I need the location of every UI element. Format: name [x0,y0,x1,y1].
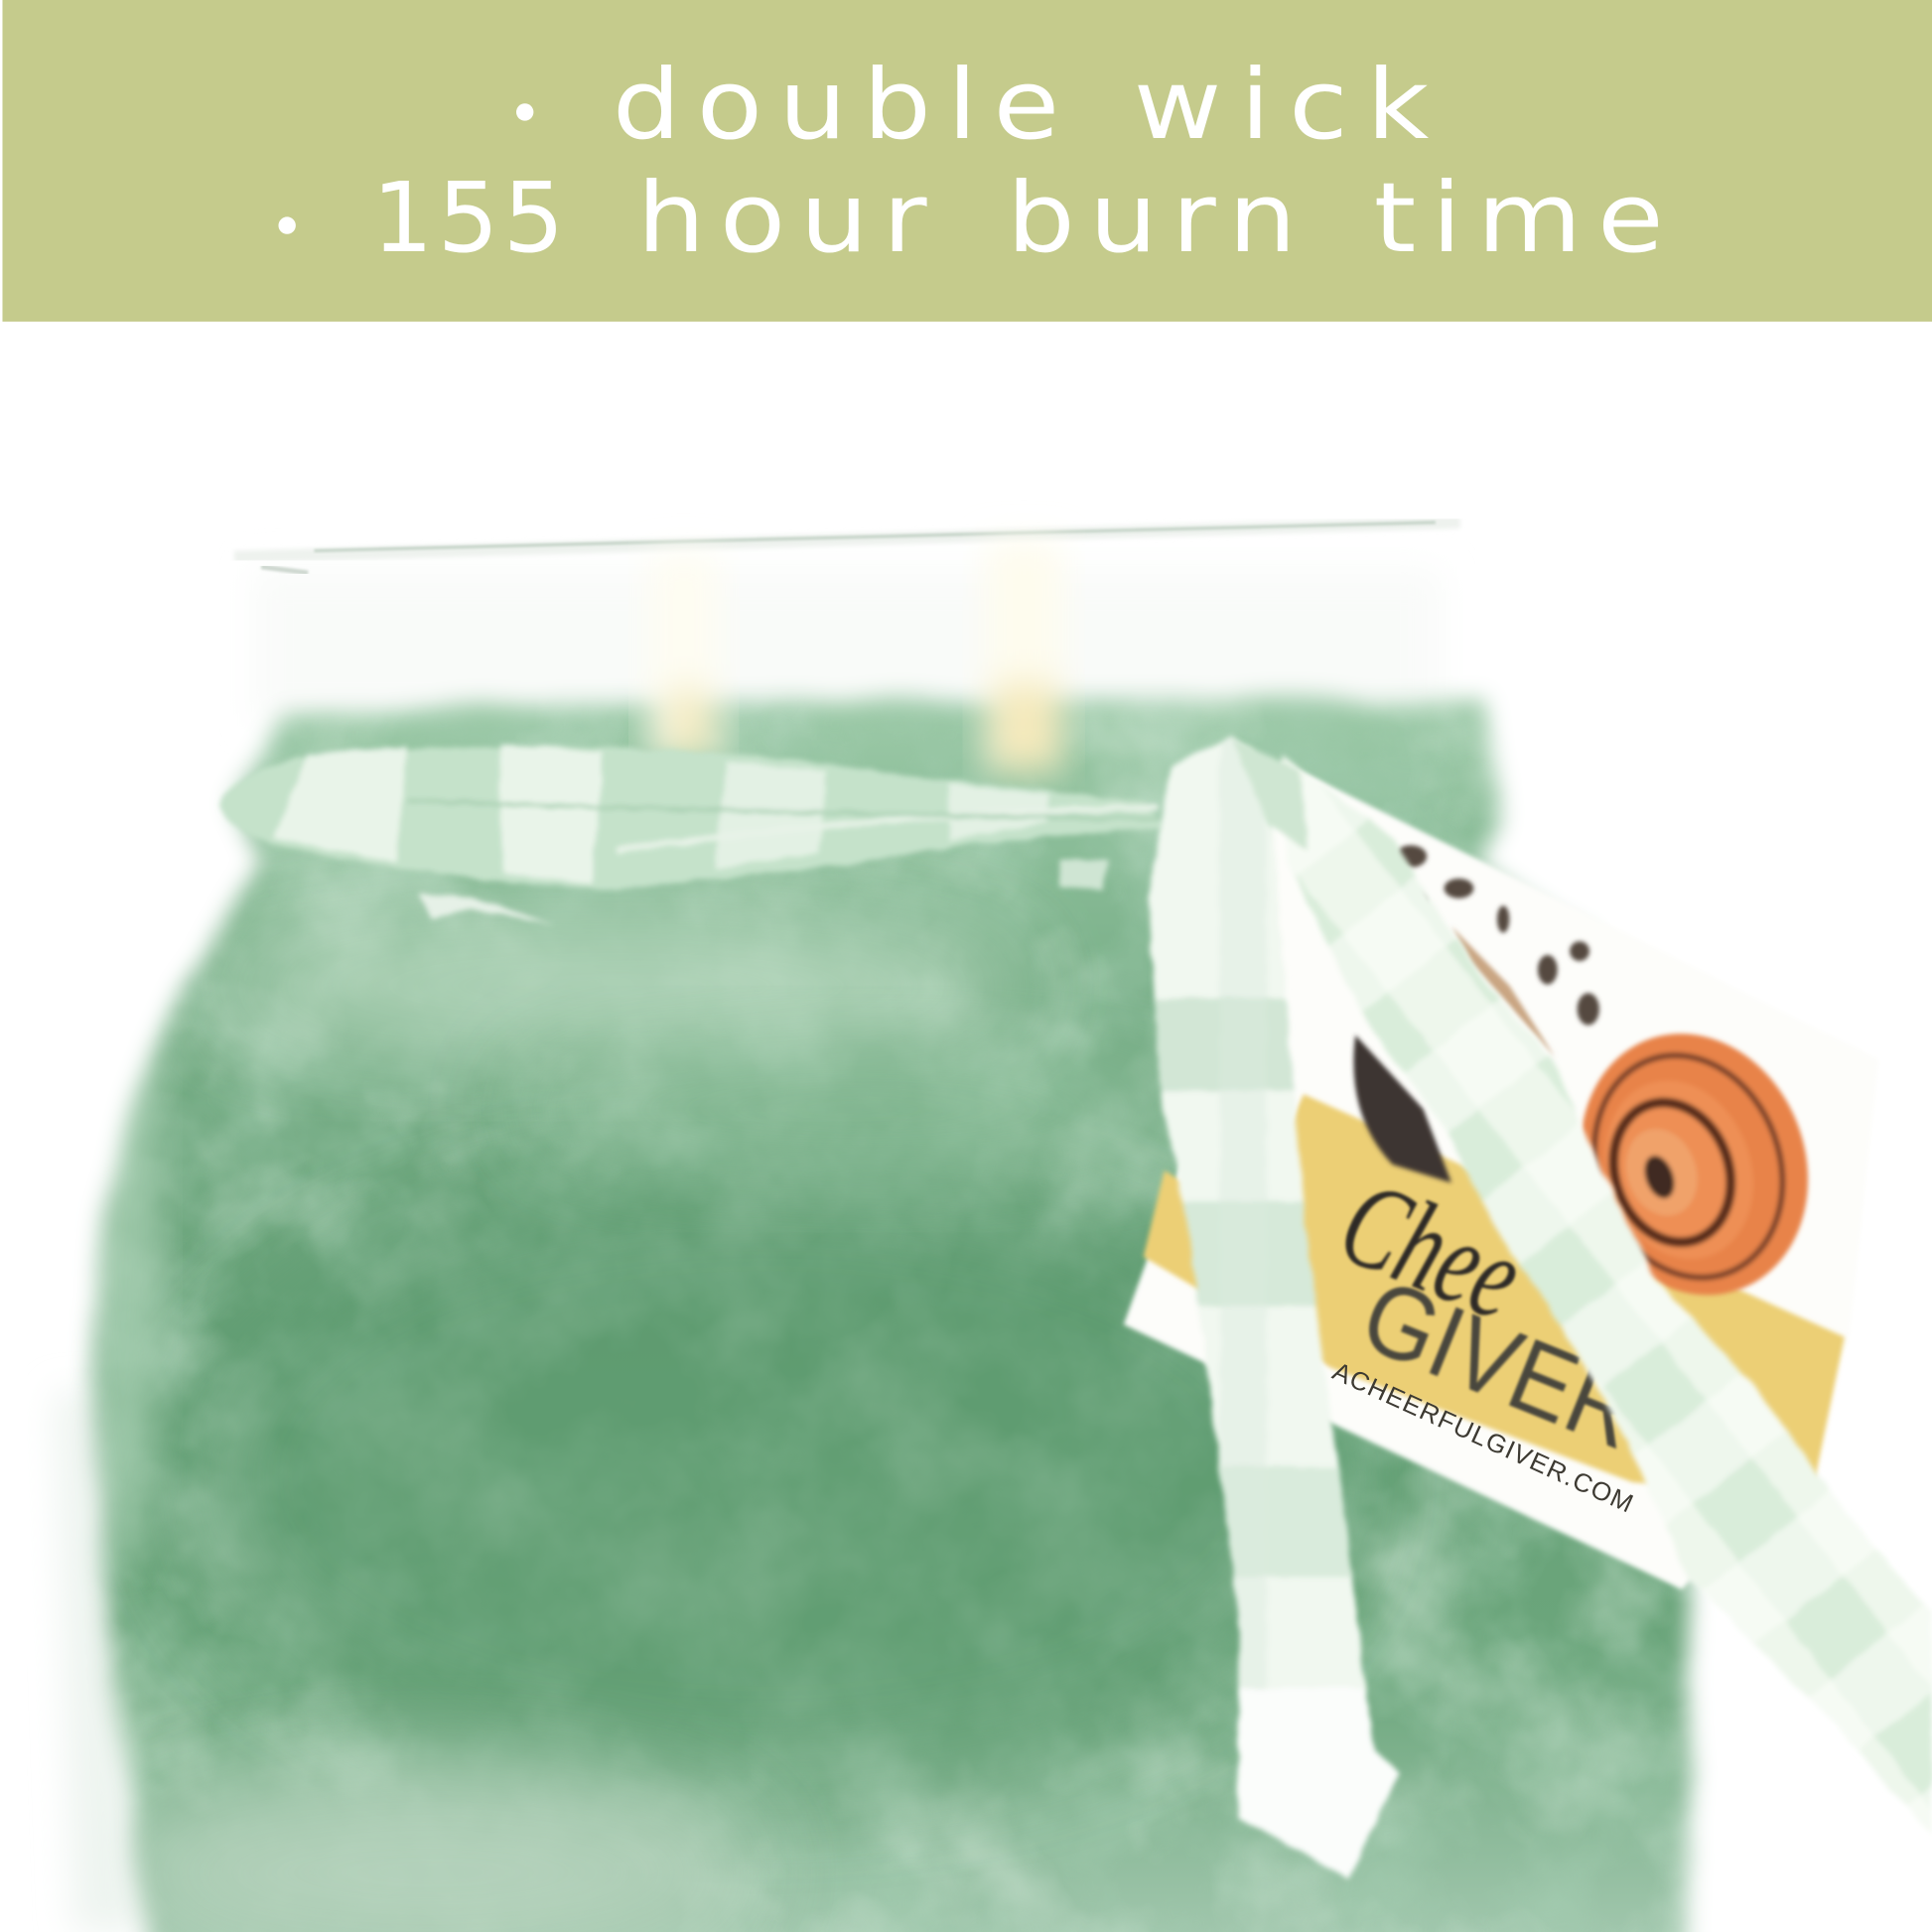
line two: 155 hour burn time: time [1374,164,1664,275]
line one: double wick [516,50,1430,162]
tag pastry sliver [1451,926,1555,1057]
wax body [75,681,1708,1932]
line two: 155 hour burn time [278,162,1664,275]
wax mottling [101,732,1690,1880]
wax pale left edge [89,1049,175,1576]
wax pale bloom near shoulder [209,918,1023,1053]
tag card [1124,761,1879,1589]
wax dark centre [185,1171,1343,1787]
ribbon knot [1232,740,1309,850]
line one: double wick: double [613,50,1059,162]
tag logo GIVER: GIVER [1347,1258,1655,1471]
line two: 155 hour burn time: 155 [372,162,564,274]
line two: 155 hour burn time: hour [637,164,927,275]
flame glow right [986,542,1062,770]
line two: 155 hour burn time: burn [1007,164,1297,275]
ribbon tail left [1134,727,1417,1897]
hang tag [1124,761,1879,1589]
glass jar rim and neck [234,522,1460,724]
line one: double wick: wick [1134,50,1430,162]
candle jar [57,518,1708,1932]
ribbon tail right [1232,740,1932,1836]
glass body edge [56,1392,148,1932]
tag url: ACHEERFULGIVER.COM [1328,1356,1638,1518]
tag chocolate piece [1353,1035,1451,1182]
wax pale lower area [111,1774,752,1932]
wax mid band [517,1047,1207,1171]
tag cinnamon roll [1545,1002,1844,1327]
tag yellow band [1144,1094,1845,1497]
gingham ribbon band [219,745,1165,924]
header banner [2,0,1932,322]
tag chocolate chips [1395,845,1599,1026]
flame glow left [649,554,719,758]
tag script logo: Chee [1323,1152,1540,1346]
